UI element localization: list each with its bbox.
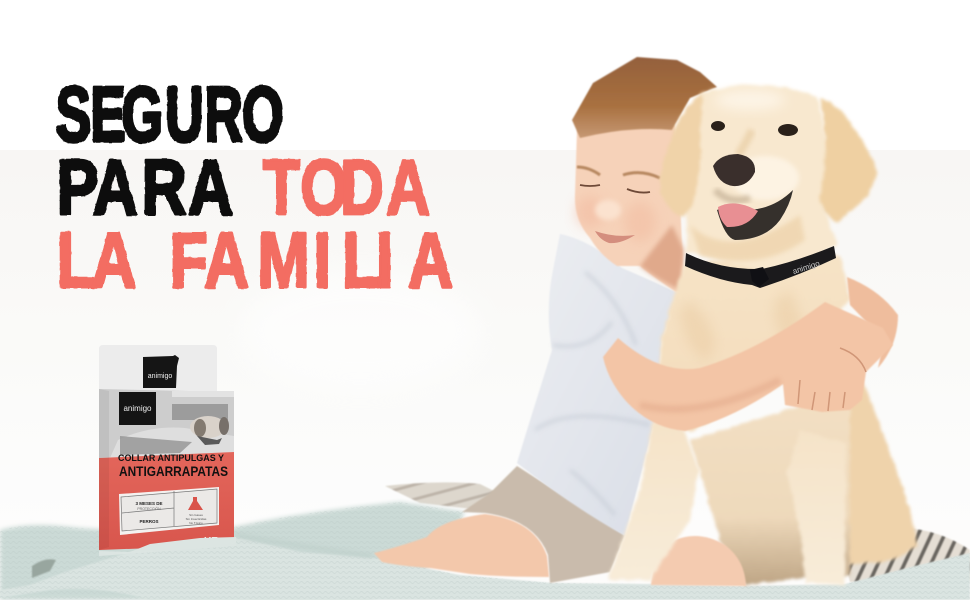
box name: COLLAR ANTIPULGAS Y <box>118 453 225 464</box>
box red panel <box>99 452 234 550</box>
boy shirt <box>517 234 678 536</box>
box EU seal: UE <box>204 536 218 547</box>
dog collar <box>685 246 836 288</box>
box photo <box>99 389 234 458</box>
boy leg <box>374 514 549 577</box>
dog front leg left <box>607 420 699 580</box>
dog head <box>660 85 877 271</box>
dog front leg right <box>787 430 846 585</box>
boy nose <box>595 200 621 220</box>
dog body <box>607 255 917 586</box>
title: PARA <box>57 143 233 231</box>
dog muzzle shading <box>690 215 805 261</box>
box hang tab <box>99 345 217 392</box>
boy knee <box>651 536 746 586</box>
boy hair <box>572 57 717 138</box>
dog eyes <box>711 121 798 136</box>
box tab logo: animigo <box>148 373 172 380</box>
box info card: Sin Gases <box>189 513 203 517</box>
box info card: PERROS <box>139 519 159 524</box>
title: SEGURO <box>56 72 283 159</box>
box info card: No Tóxico <box>189 521 203 525</box>
box info card <box>119 487 219 535</box>
boy shorts <box>462 466 625 583</box>
boy brows <box>577 167 660 178</box>
box info card: Sin Insecticidas <box>186 517 207 521</box>
boy legs and shorts <box>374 466 625 583</box>
boy hand <box>798 348 866 411</box>
dog collar: animigo <box>791 259 821 276</box>
dog belly <box>690 390 850 585</box>
box name: ANTIGARRAPATAS <box>119 463 228 479</box>
box logo: animigo <box>123 404 152 413</box>
blanket <box>0 482 970 600</box>
title: LA <box>57 216 136 304</box>
box info card: PROTECCIÓN <box>137 506 161 511</box>
shirt folds <box>535 272 650 515</box>
boy eyes <box>580 185 650 193</box>
dog hind <box>840 383 917 565</box>
box tab logo <box>143 355 179 388</box>
title: TODA <box>263 144 430 231</box>
dog tongue <box>718 203 758 227</box>
blanket fold <box>32 559 56 578</box>
dog mouth <box>717 190 793 240</box>
boy arm <box>603 302 893 431</box>
boy mouth <box>595 231 635 243</box>
boy far arm <box>847 277 898 368</box>
dog nose <box>713 154 755 186</box>
dog ears <box>660 92 703 217</box>
dog chest <box>655 255 850 432</box>
title: FAMILIA <box>170 216 453 304</box>
boy head <box>572 57 717 292</box>
box name <box>118 453 228 479</box>
box info card: 3 MESES DE <box>135 501 163 506</box>
blanket over box <box>99 537 236 556</box>
product box <box>99 345 236 556</box>
box logo <box>119 392 156 425</box>
title <box>56 72 453 304</box>
